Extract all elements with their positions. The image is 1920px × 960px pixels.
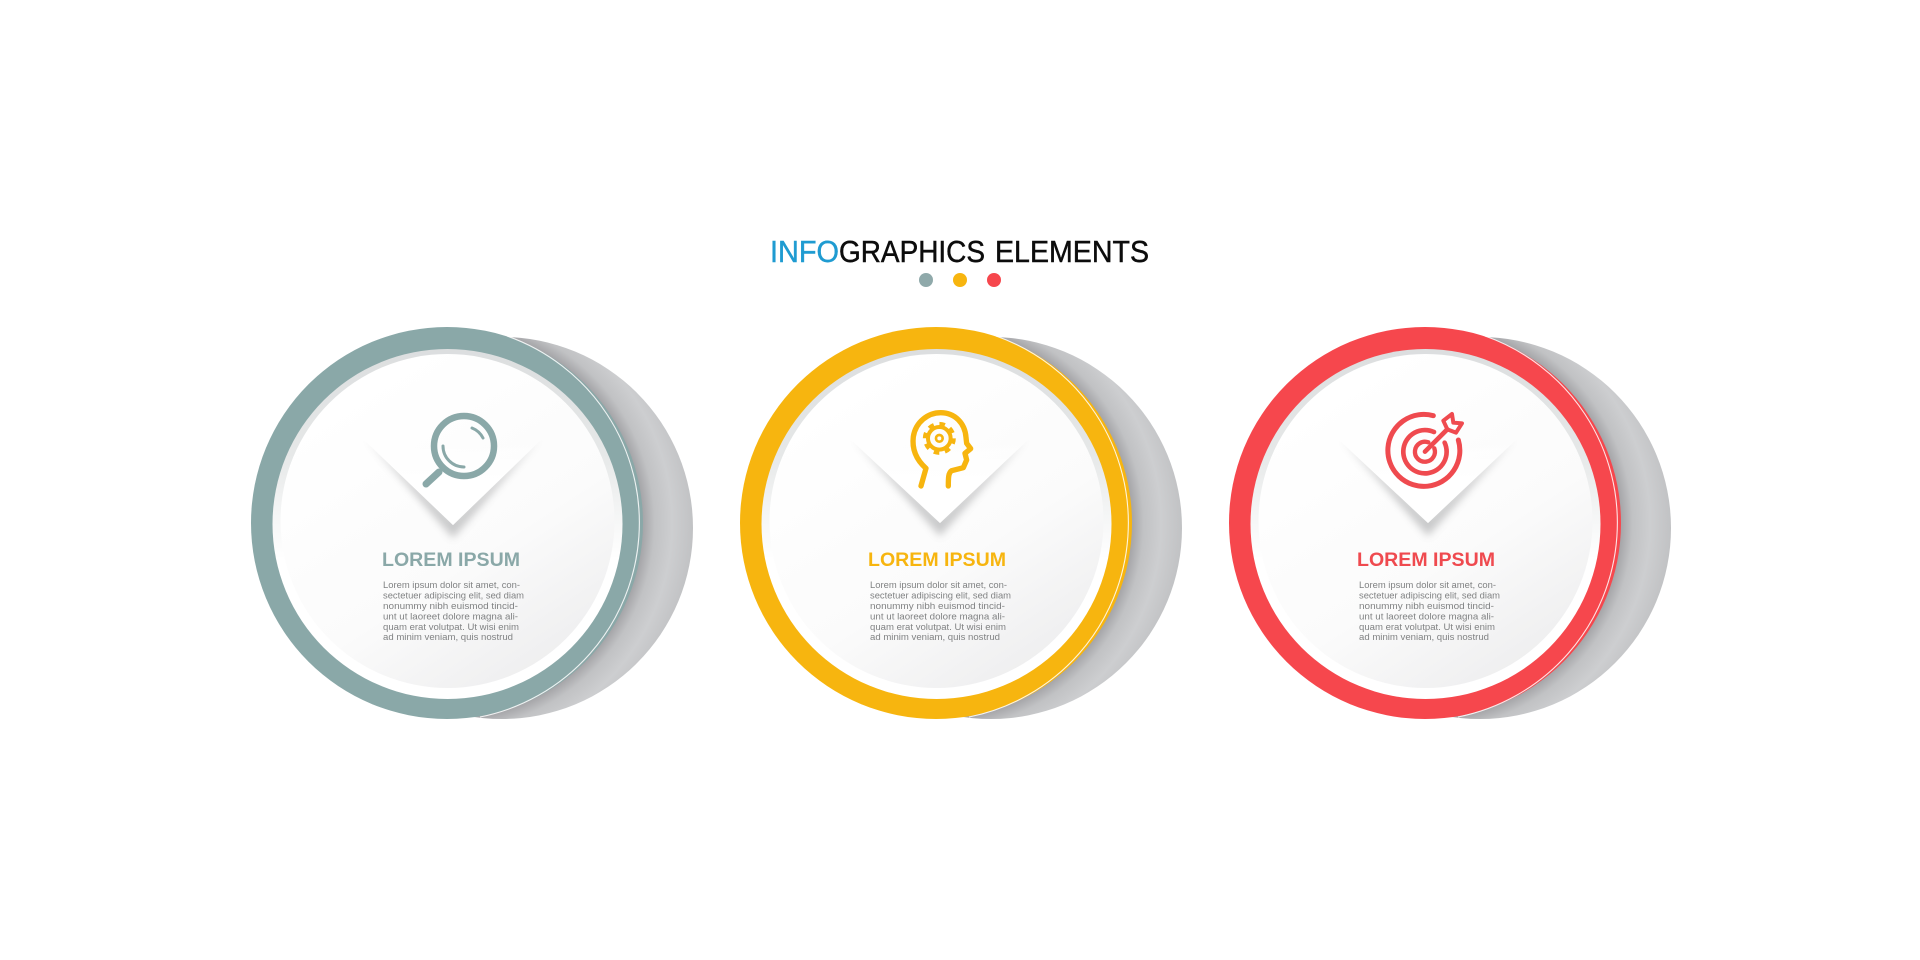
- text block: ad minim veniam, quis nostrud: [870, 632, 1000, 643]
- panel: sage circle: [251, 327, 693, 719]
- text block: unt ut laoreet dolore magna ali-: [870, 612, 1005, 622]
- icon: head with gear: [913, 413, 971, 486]
- text block: quam erat volutpat. Ut wisi enim: [1359, 622, 1495, 633]
- text block: unt ut laoreet dolore magna ali-: [383, 612, 518, 622]
- infographic canvas: [251, 240, 1671, 719]
- text block: sectetuer adipiscing elit, sed diam: [870, 590, 1011, 602]
- text block: nonummy nibh euismod tincid-: [1359, 601, 1494, 612]
- text block: Lorem ipsum dolor sit amet, con-: [383, 580, 520, 591]
- title: GRAPHICS: [839, 235, 985, 269]
- text block: ad minim veniam, quis nostrud: [383, 632, 513, 643]
- title: ELEMENTS: [995, 235, 1149, 269]
- text block: quam erat volutpat. Ut wisi enim: [870, 622, 1006, 633]
- panel: yellow circle: [740, 327, 1182, 719]
- text block: ad minim veniam, quis nostrud: [1359, 632, 1489, 643]
- title: [770, 235, 1149, 269]
- title dots: [919, 273, 1001, 287]
- heading: LOREM IPSUM: [868, 550, 1006, 571]
- heading: LOREM IPSUM: [382, 550, 520, 571]
- text block: sectetuer adipiscing elit, sed diam: [383, 590, 524, 602]
- icon: target with arrow: [1388, 414, 1462, 486]
- text block: quam erat volutpat. Ut wisi enim: [383, 622, 519, 633]
- heading: LOREM IPSUM: [1357, 550, 1495, 571]
- text block: nonummy nibh euismod tincid-: [870, 601, 1005, 612]
- icon: magnifying glass: [426, 416, 494, 484]
- text block: Lorem ipsum dolor sit amet, con-: [1359, 580, 1496, 591]
- text block: unt ut laoreet dolore magna ali-: [1359, 612, 1494, 622]
- text block: [1359, 580, 1500, 643]
- text block: [383, 580, 524, 643]
- panel: red circle: [1229, 327, 1671, 719]
- text block: Lorem ipsum dolor sit amet, con-: [870, 580, 1007, 591]
- title: INFO: [770, 235, 839, 269]
- text block: nonummy nibh euismod tincid-: [383, 601, 518, 612]
- text block: [870, 580, 1011, 643]
- text block: sectetuer adipiscing elit, sed diam: [1359, 590, 1500, 602]
